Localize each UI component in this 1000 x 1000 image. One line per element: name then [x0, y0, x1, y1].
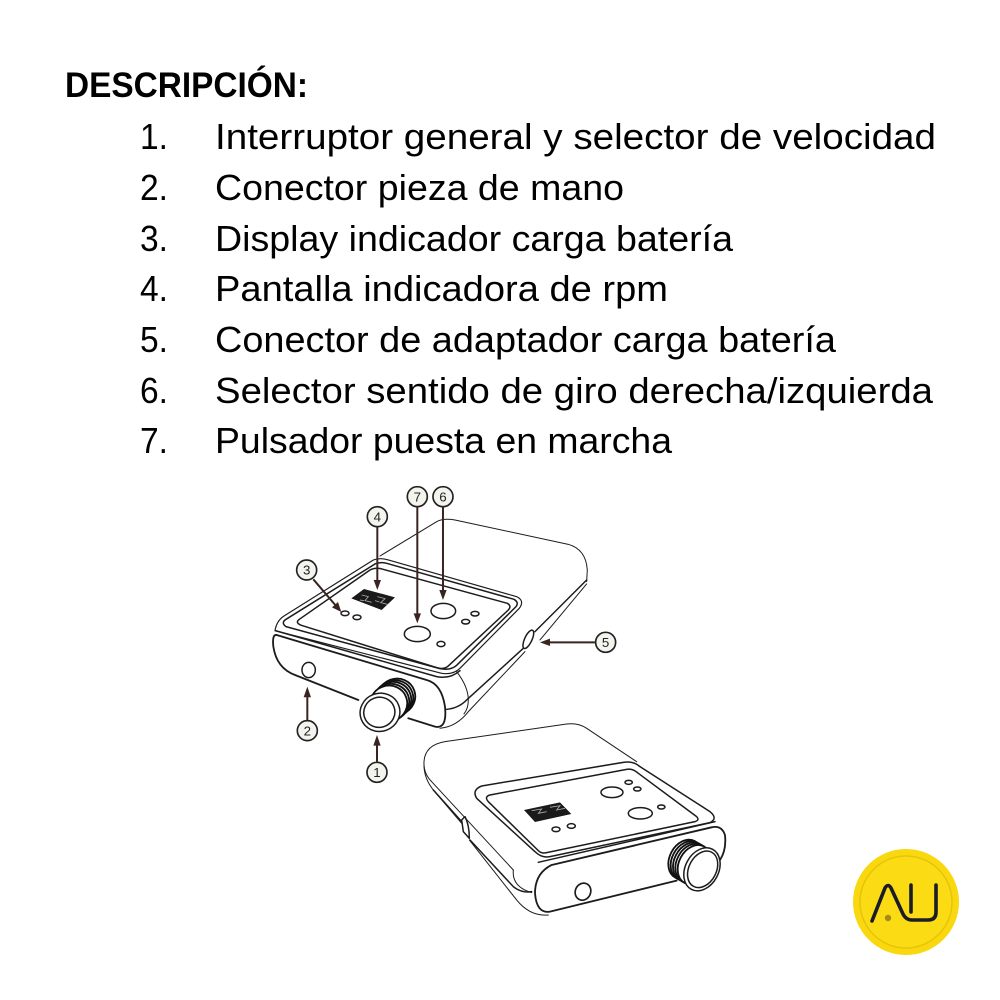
device body — [424, 724, 725, 915]
callout 7 — [407, 487, 427, 623]
push button — [404, 626, 430, 642]
numbered list — [140, 116, 936, 461]
numbered list: 7. — [140, 420, 168, 461]
numbered list: Pulsador puesta en marcha — [215, 420, 673, 461]
rotary knob — [355, 673, 420, 737]
numbered list: 4. — [140, 268, 168, 309]
callout 3: 3 — [303, 563, 310, 578]
callout 6 — [433, 487, 453, 600]
logo — [853, 849, 959, 955]
callout 3 — [297, 560, 341, 612]
numbered list: Pantalla indicadora de rpm — [215, 268, 668, 309]
connector: charger — [462, 817, 469, 838]
callout 4 — [367, 507, 387, 590]
callout 1: 1 — [373, 765, 381, 780]
callout 5: 5 — [602, 635, 609, 650]
indicator lights — [341, 611, 479, 647]
connector: handpiece — [572, 881, 594, 903]
rpm display — [351, 589, 395, 610]
callout 5 — [540, 632, 616, 652]
push button — [628, 808, 652, 819]
numbered list: 6. — [140, 370, 168, 411]
callout 4: 4 — [374, 509, 382, 524]
numbered list: 5. — [140, 319, 168, 360]
numbered list: 1. — [140, 116, 168, 157]
device diagram with callouts — [273, 487, 616, 782]
second device view — [424, 724, 727, 915]
callout 2: 2 — [304, 723, 311, 738]
connector: handpiece — [302, 662, 315, 678]
callout 1 — [367, 735, 387, 782]
direction selector — [601, 787, 623, 798]
title: DESCRIPCIÓN: — [65, 65, 308, 105]
numbered list: Conector pieza de mano — [215, 167, 624, 208]
numbered list: Display indicador carga batería — [215, 218, 734, 259]
numbered list: Interruptor general y selector de velocidad — [215, 116, 936, 157]
callout 2 — [297, 687, 317, 741]
indicator lights — [552, 780, 665, 832]
callout 7: 7 — [414, 489, 421, 504]
device body — [273, 519, 587, 728]
callout 6: 6 — [439, 489, 447, 504]
numbered list: 2. — [140, 167, 168, 208]
numbered list: Conector de adaptador carga batería — [215, 319, 837, 360]
direction selector — [431, 603, 456, 619]
connector: charger — [521, 629, 536, 650]
numbered list: Selector sentido de giro derecha/izquierda — [215, 370, 934, 411]
rpm display — [524, 802, 571, 822]
rotary knob — [662, 834, 727, 897]
numbered list: 3. — [140, 218, 168, 259]
